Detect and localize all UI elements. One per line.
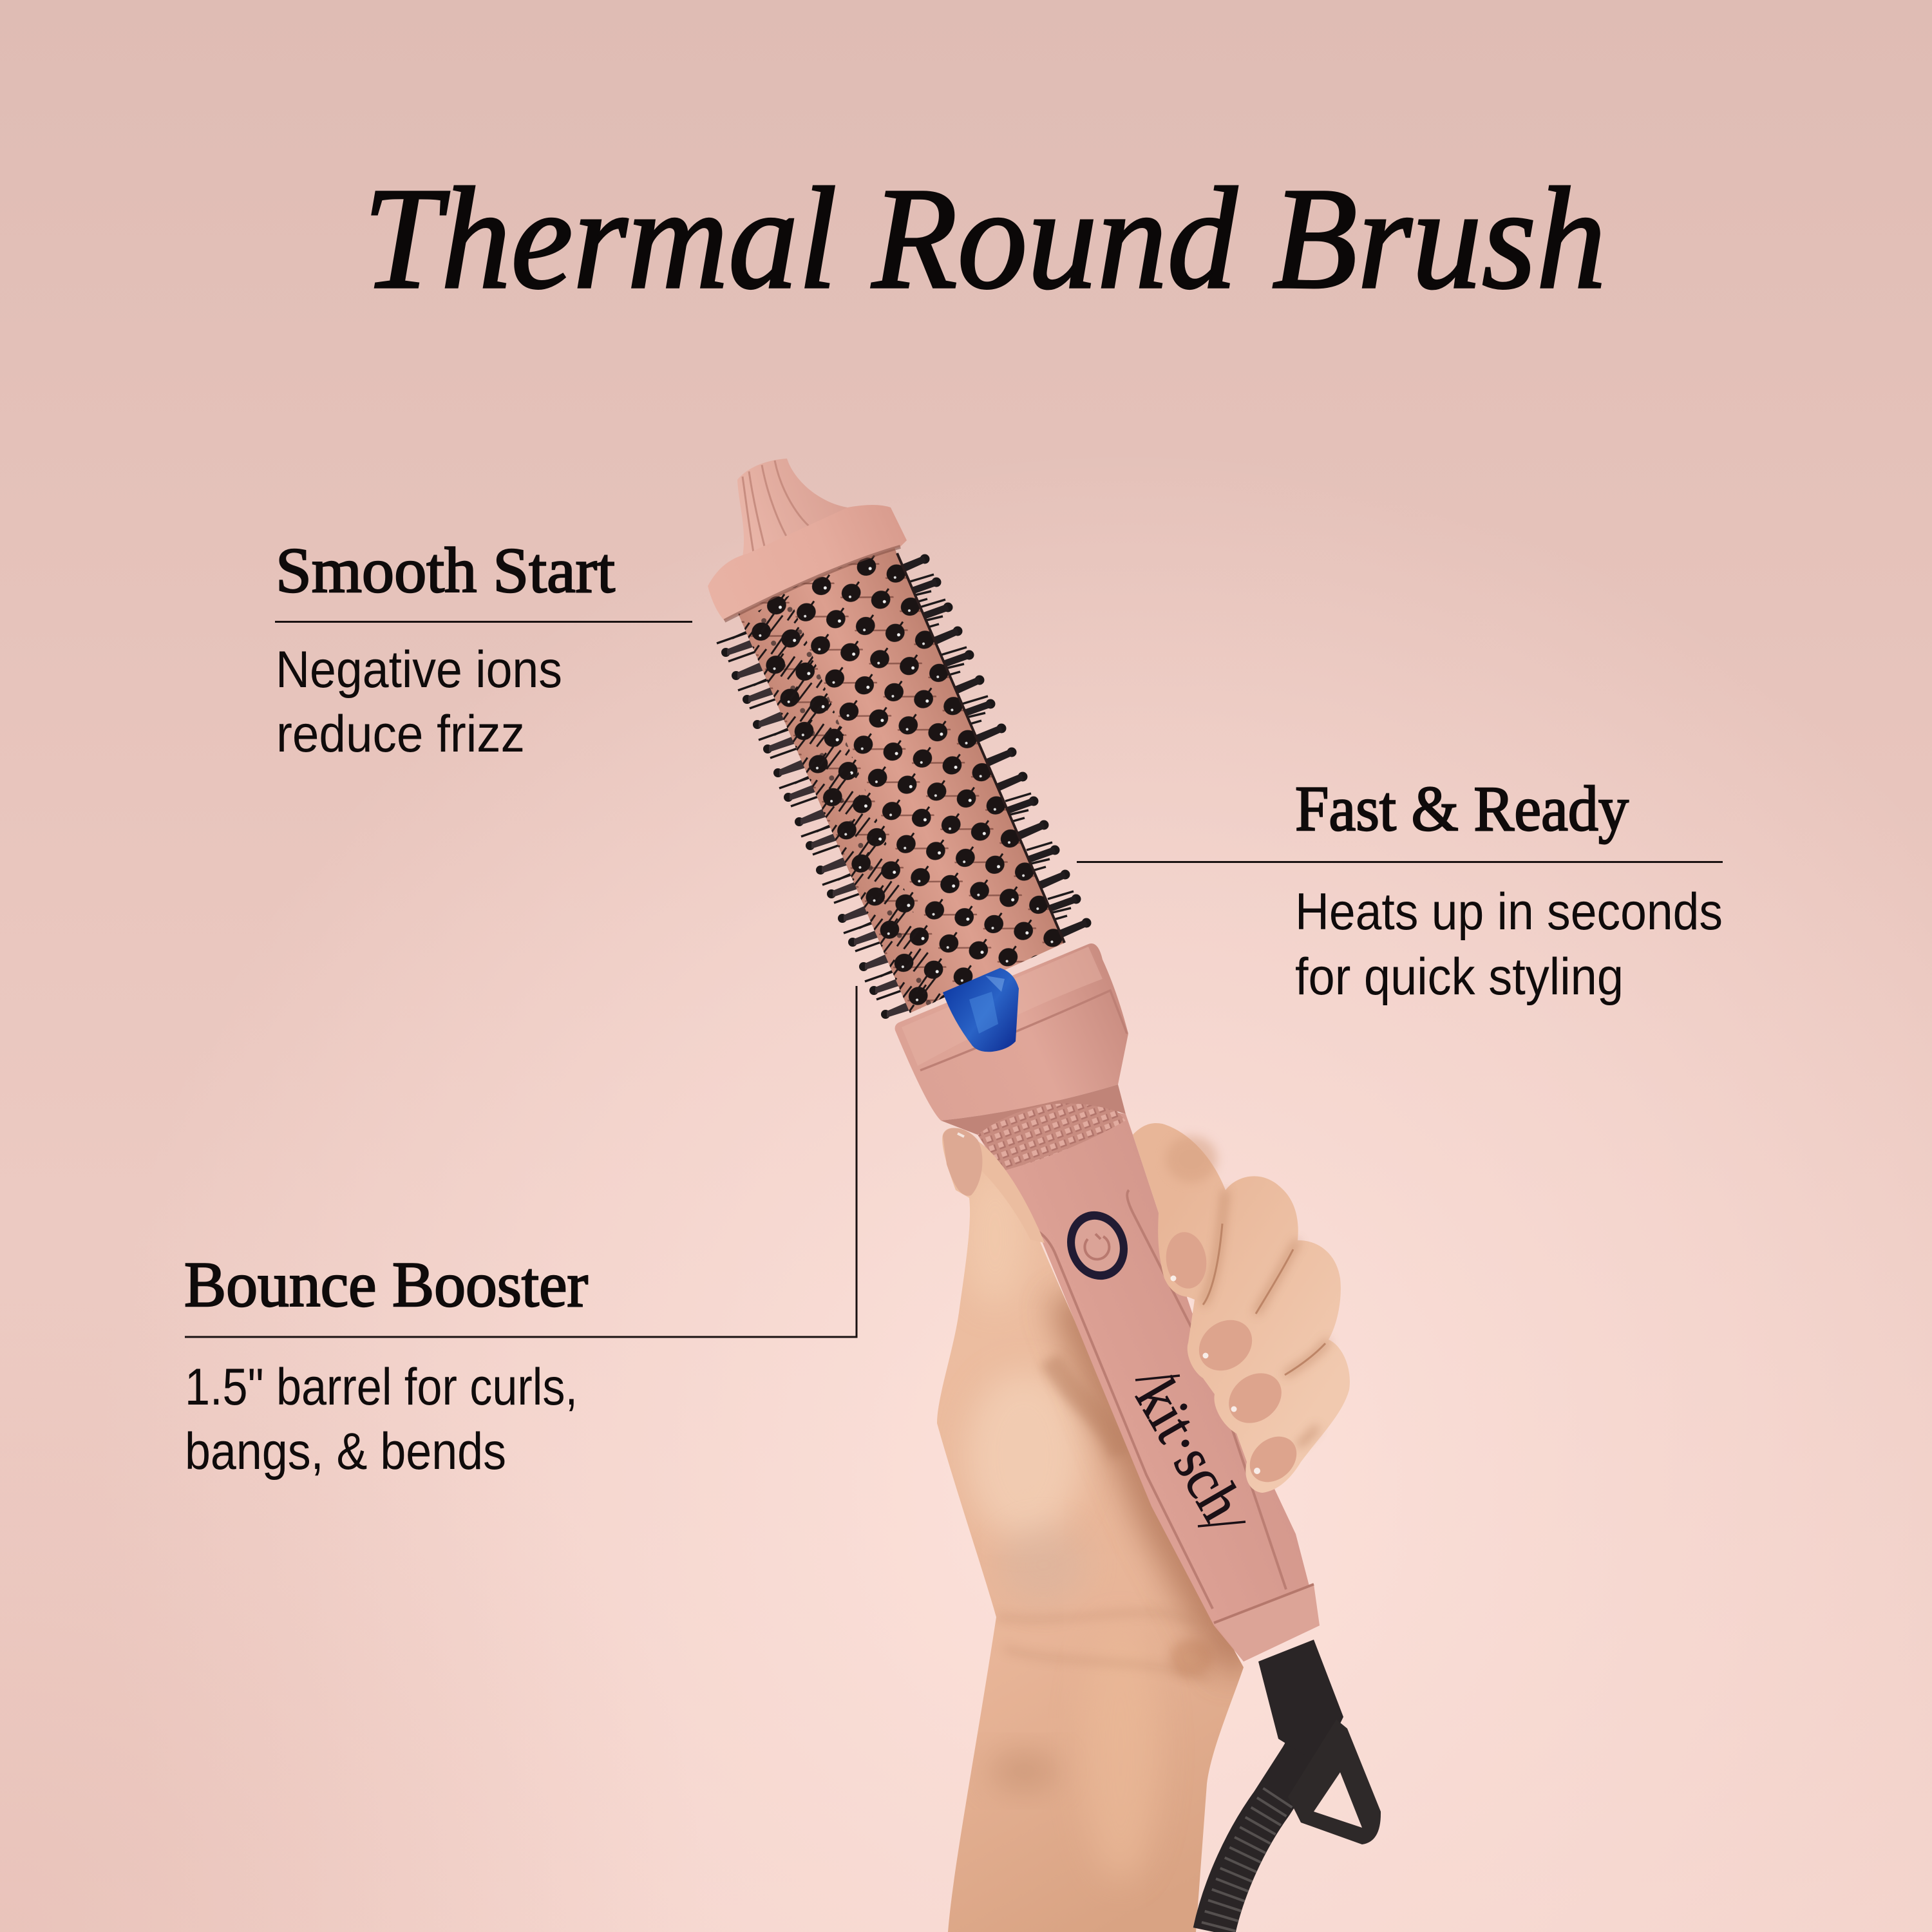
callout text <box>1295 883 1723 1006</box>
brush nozzle and cap <box>708 459 907 621</box>
callout: bounce booster <box>184 986 857 1481</box>
callout text: for quick styling <box>1295 948 1624 1006</box>
hand: fingers <box>1133 1123 1350 1493</box>
hand: thumb <box>943 1128 1045 1243</box>
callout heading: Smooth Start <box>276 535 615 606</box>
brush bristles: sides <box>717 554 1091 1019</box>
callout text <box>276 641 562 763</box>
callout text: Negative ions <box>276 641 562 699</box>
callout text: reduce frizz <box>276 705 525 763</box>
hand: arm and palm <box>937 1129 1244 1932</box>
callout text: 1.5" barrel for curls, <box>185 1358 578 1416</box>
finger nails <box>1162 1229 1305 1492</box>
callout text: Heats up in seconds <box>1295 883 1723 941</box>
brush collar <box>895 943 1128 1135</box>
brush handle <box>978 1095 1320 1662</box>
brand logo: kit·sch <box>1122 1368 1255 1531</box>
icon: blue indicator light <box>943 968 1019 1052</box>
cord loop hook <box>1288 1719 1381 1844</box>
title: Thermal Round Brush <box>363 158 1606 319</box>
callout: smooth start <box>275 535 692 763</box>
icon: thumb nail <box>943 1128 982 1196</box>
callout heading: Bounce Booster <box>184 1249 588 1320</box>
knurled grip <box>978 1099 1126 1171</box>
callout text <box>185 1358 578 1481</box>
callout text: bangs, & bends <box>185 1423 506 1481</box>
callout heading: Fast & Ready <box>1295 773 1629 844</box>
brush barrel <box>737 535 1065 1013</box>
power button <box>1057 1203 1137 1288</box>
callout: fast and ready <box>1077 773 1723 1006</box>
power cord <box>1214 1640 1381 1932</box>
